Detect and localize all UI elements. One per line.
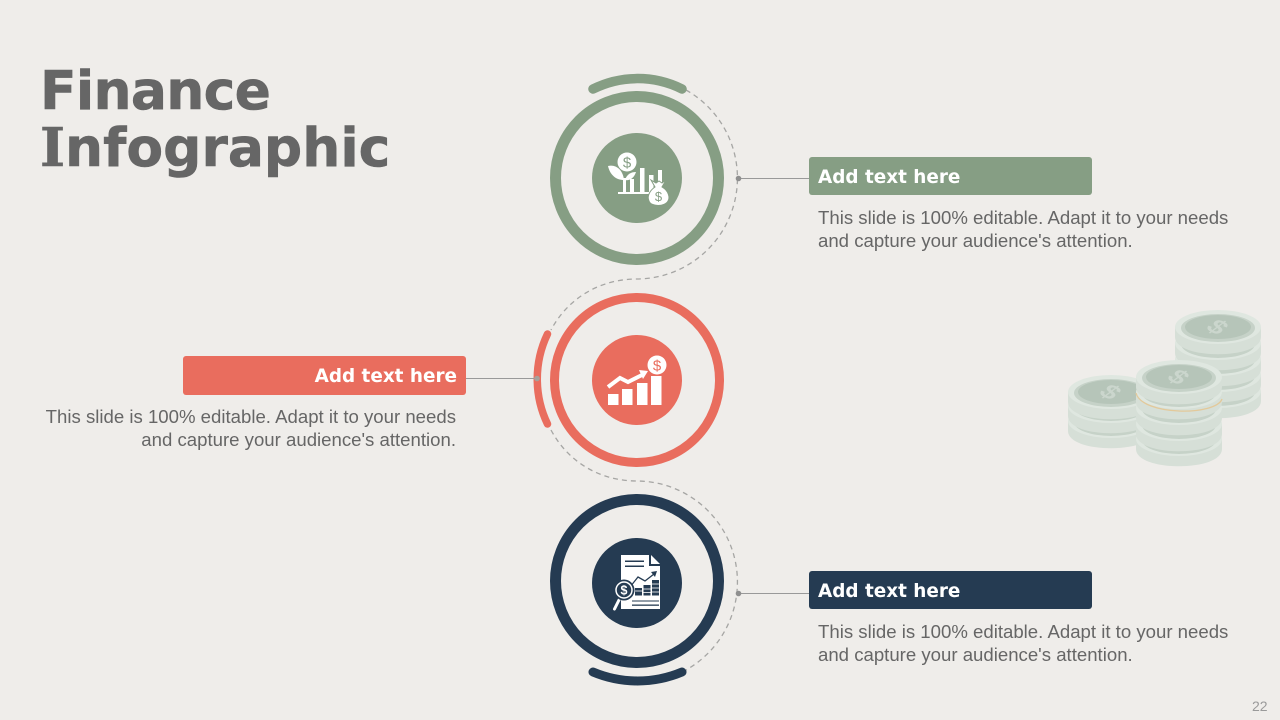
icon: plant, bars and money bag	[592, 133, 682, 223]
icon: plant, bars and money bag: $	[623, 154, 632, 172]
page number: 22	[1252, 698, 1268, 714]
text block: red	[46, 406, 456, 450]
label bar: red	[183, 356, 466, 395]
label bar: green: Add text here	[818, 167, 960, 188]
text block: red: and capture your audience's attention.	[141, 429, 456, 450]
text block: red: This slide is 100% editable. Adapt it to your needs	[46, 406, 456, 427]
icon: financial report with magnifier: $	[621, 584, 628, 598]
label bar: green	[809, 157, 1092, 195]
illustration: coin stacks	[1068, 310, 1261, 466]
middle stack: $	[1161, 366, 1195, 389]
label bar: navy: Add text here	[818, 581, 960, 602]
text block: navy	[818, 621, 1228, 665]
right stack: $	[1200, 316, 1234, 339]
icon: plant, bars and money bag: $	[655, 189, 663, 204]
dashed connector path	[551, 90, 737, 670]
icon: growth chart with coin: $	[653, 358, 662, 374]
icon: financial report with magnifier	[592, 538, 682, 628]
ring: green	[556, 79, 718, 260]
right stack	[1175, 310, 1261, 418]
connector: bottom	[736, 591, 809, 596]
text block: green: and capture your audience's attention.	[818, 230, 1133, 251]
text block: green: This slide is 100% editable. Adapt it to your needs	[818, 207, 1228, 228]
text block: green	[818, 207, 1228, 251]
label bar: navy	[809, 571, 1092, 609]
title	[40, 59, 390, 179]
left stack: $	[1093, 381, 1127, 404]
ring: navy	[556, 500, 718, 681]
middle stack	[1136, 360, 1222, 466]
left stack	[1068, 375, 1154, 448]
text block: navy: This slide is 100% editable. Adapt it to your needs	[818, 621, 1228, 642]
title: Infographic	[40, 116, 390, 179]
icon: growth chart with coin	[592, 335, 682, 425]
label bar: red: Add text here	[315, 366, 457, 387]
connector: middle	[466, 376, 540, 381]
connector: top	[736, 176, 809, 181]
title: Finance	[40, 59, 270, 122]
text block: navy: and capture your audience's attention.	[818, 644, 1133, 665]
ring: red	[537, 298, 720, 462]
